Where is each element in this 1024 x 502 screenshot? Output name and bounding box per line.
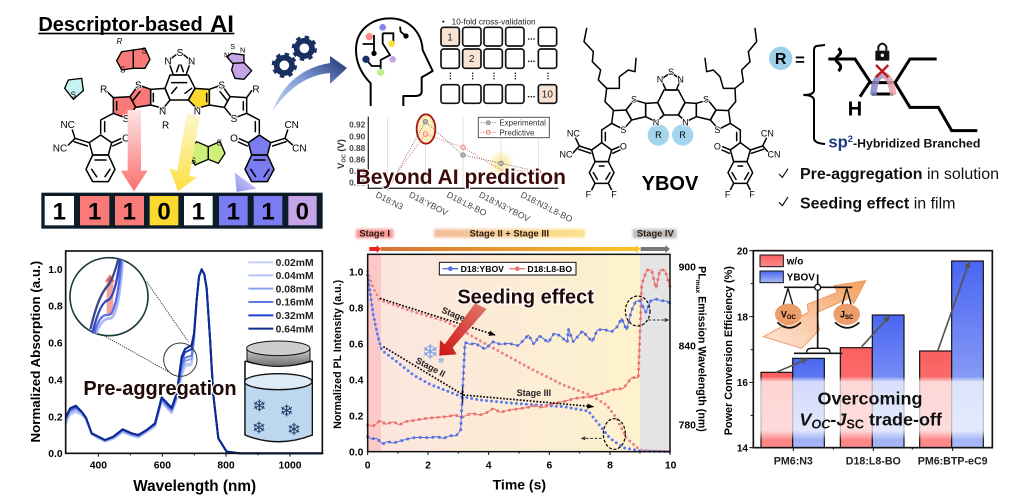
PL decay and emission curves	[368, 270, 671, 452]
R group definition	[769, 44, 977, 144]
molecule: YBOV: O	[714, 141, 721, 151]
chart legend	[439, 262, 576, 275]
arrow: curved blue flow	[272, 56, 347, 112]
chart axes: Emission Wavelength (nm)	[696, 293, 708, 432]
icon: vial with aggregates	[245, 341, 312, 442]
molecule: YBOV: CN	[768, 149, 780, 159]
absorption spectra	[66, 269, 322, 457]
chart axes	[28, 251, 322, 495]
heading: Seeding effect: Seeding effect	[457, 286, 594, 308]
bars	[761, 261, 983, 448]
10-fold cross-validation grid: 10-fold cross-validation	[452, 18, 536, 27]
R group definition: H	[848, 99, 862, 121]
chart axes: 900	[679, 262, 696, 273]
molecule: acceptor backbone with coloured fragments: S	[177, 48, 184, 59]
fragment: purple benzothiadiazole: S	[230, 42, 235, 51]
chart axes: 1000	[279, 461, 302, 472]
stage header labels: Stage II + Stage III	[470, 229, 549, 239]
line chart: VOC experimental vs predictive: V	[336, 163, 346, 169]
chart axes	[332, 254, 708, 493]
icon: snowflakes: ❄	[437, 357, 445, 367]
molecule: YBOV: CN	[761, 129, 774, 139]
chart axes: 2	[425, 460, 431, 471]
icon: balance with VOC and JSC	[763, 274, 866, 353]
fragment: green thienothiophene: S	[191, 156, 196, 165]
chart axes: 0.6	[48, 338, 63, 349]
fragment: green thienothiophene	[187, 139, 225, 165]
label: sp2-Hybridized Branched: -Hybridized Branched	[853, 136, 980, 150]
chart axes: 0	[365, 460, 371, 471]
concentration legend: 0.64mM	[276, 324, 314, 335]
icon: snowflakes	[422, 340, 445, 367]
fragment: red thienothiophene: S	[120, 66, 125, 75]
chart axes: PM6:BTP-eC9	[918, 456, 988, 468]
heading: overcoming trade-off: J	[836, 410, 847, 430]
molecule: YBOV: N	[657, 74, 663, 84]
molecule: YBOV: S	[668, 67, 674, 77]
chart axes: 16	[737, 378, 748, 389]
chart axes: 0.2	[349, 411, 364, 422]
molecule: acceptor backbone with coloured fragments: N	[164, 57, 172, 68]
line chart: VOC experimental vs predictive: D18:N3	[374, 190, 405, 212]
concentration legend: 0.04mM	[276, 271, 314, 282]
descriptor bit string: 1	[123, 198, 136, 225]
feature list	[779, 166, 999, 212]
descriptor bit string: 1	[88, 198, 101, 225]
icon: snowflakes: ❄	[422, 340, 439, 364]
chart axes: 0.0	[349, 447, 364, 458]
molecule: YBOV: R	[655, 130, 662, 140]
chart axes: 14	[737, 443, 748, 454]
chart axes: 0.2	[48, 412, 63, 423]
icon: vial with aggregates: ❄	[280, 402, 294, 421]
icon: gears	[273, 37, 315, 76]
label: sp2-Hybridized Branched: sp	[828, 132, 848, 151]
legend	[760, 255, 815, 284]
heading: overcoming trade-off: Overcoming	[818, 388, 922, 408]
stage background bands	[368, 254, 670, 452]
chart axes: 840	[679, 341, 696, 352]
10-fold cross-validation grid: 1	[447, 32, 453, 43]
chart axes: Normalized Absorption (a.u.)	[28, 261, 43, 443]
heading: overcoming trade-off: SC	[846, 417, 864, 431]
chart legend: D18:YBOV	[461, 264, 504, 274]
fragment: purple benzothiadiazole: N	[240, 46, 245, 55]
chart axes: PL	[696, 266, 708, 280]
molecule: acceptor backbone with coloured fragments	[53, 48, 307, 182]
descriptor bit string: 1	[227, 198, 240, 225]
annotation arrows and stage labels: Stage II	[414, 355, 447, 379]
molecule: acceptor backbone with coloured fragments: R	[190, 121, 197, 132]
fragment: cyan thiophene	[65, 78, 83, 100]
molecule: YBOV: NC	[560, 149, 573, 159]
molecule: acceptor backbone with coloured fragments: S	[218, 81, 225, 92]
molecule: YBOV: N	[682, 118, 689, 128]
label: YBOV: YBOV	[642, 173, 699, 195]
descriptor bit string: 1	[261, 198, 275, 225]
stage header labels: Stage IV	[637, 229, 675, 239]
descriptor bit string: 1	[53, 198, 66, 225]
descriptor bit string	[41, 193, 323, 229]
icon: balance with VOC and JSC: V	[781, 310, 787, 320]
molecule: YBOV: F	[586, 189, 592, 199]
molecule: YBOV: O	[620, 141, 627, 151]
gray trend arrows	[776, 262, 969, 372]
chart axes: 0.8	[48, 302, 63, 313]
heading: Pre-aggregation: Pre-aggregation	[83, 378, 237, 400]
arrow: violet	[235, 173, 257, 192]
fade overlay	[754, 377, 991, 440]
line chart: VOC experimental vs predictive: Experimental	[499, 119, 546, 128]
line chart: VOC experimental vs predictive: D18:N3:YBOV	[477, 190, 532, 224]
heading: overcoming trade-off	[799, 388, 943, 431]
line chart: VOC experimental vs predictive: 0.82	[349, 177, 366, 187]
chart axes: max	[694, 280, 701, 293]
icon: vial with aggregates: ❄	[252, 397, 266, 416]
molecule: acceptor backbone with coloured fragments: R	[100, 84, 107, 95]
chart axes: 6	[546, 460, 552, 471]
chart axes: 780	[679, 421, 696, 432]
chart axes: 400	[90, 461, 107, 472]
concentration legend: 0.16mM	[276, 298, 314, 309]
molecule: acceptor backbone with coloured fragments: NC	[53, 143, 67, 154]
heading: overcoming trade-off: V	[799, 410, 813, 430]
molecule: acceptor backbone with coloured fragments: N	[194, 106, 201, 117]
fragment: purple benzothiadiazole	[224, 42, 252, 79]
fragment: purple benzothiadiazole: N	[224, 50, 229, 59]
molecule: YBOV: F	[725, 189, 731, 199]
molecule: acceptor backbone with coloured fragments: N	[159, 106, 166, 117]
line chart: VOC experimental vs predictive: D18:L8-BO	[445, 190, 488, 218]
annotation arrows and stage labels: Stage II	[440, 305, 474, 326]
icon: vial with aggregates: ❄	[287, 420, 301, 439]
fragment: red thienothiophene	[116, 37, 150, 75]
chart axes: 1.0	[48, 265, 63, 276]
label: sp2-Hybridized Branched: 2	[848, 134, 853, 144]
molecule: acceptor backbone with coloured fragments: O	[122, 134, 130, 145]
arrow: seeding red	[439, 303, 487, 356]
chart axes: Time (s)	[493, 477, 546, 493]
arrow: yellow	[169, 113, 200, 191]
chart axes: 0.6	[349, 339, 364, 350]
chart axes: 4	[486, 460, 492, 471]
concentration legend: 0.08mM	[276, 284, 314, 295]
heading: overcoming trade-off: -	[830, 410, 836, 430]
panel: in-situ PL chart	[332, 229, 708, 493]
line chart: VOC experimental vs predictive: 0.90	[349, 131, 366, 141]
feature list: Seeding effect in film	[800, 195, 955, 212]
title: Descriptor-based AI: Descriptor-based	[38, 14, 203, 36]
chart axes: 600	[154, 461, 171, 472]
molecule: acceptor backbone with coloured fragments: NC	[60, 120, 75, 131]
heading: overcoming trade-off: trade-off	[864, 410, 943, 430]
chart axes: Wavelength (nm)	[133, 478, 256, 495]
descriptor bit string: 0	[296, 198, 309, 225]
molecule: acceptor backbone with coloured fragments: O	[230, 134, 238, 145]
legend: YBOV	[787, 273, 815, 284]
icon: AI head	[356, 18, 433, 106]
stage header labels: Stage I	[359, 229, 390, 239]
chart axes: 8	[607, 460, 613, 471]
line chart: VOC experimental vs predictive: Predictive	[499, 128, 535, 137]
panel: YBOV structure	[560, 28, 999, 212]
chart axes: 0.4	[349, 375, 364, 386]
stage header labels	[356, 229, 677, 239]
molecule: YBOV	[560, 28, 780, 199]
icon: balance with VOC and JSC: SC	[845, 315, 854, 321]
chart axes: 0.0	[48, 449, 63, 460]
stage timeline arrows	[369, 245, 670, 253]
line chart: VOC experimental vs predictive: 0.92	[349, 119, 366, 129]
molecule: acceptor backbone with coloured fragments: S	[135, 81, 142, 92]
concentration legend: 0.02mM	[276, 258, 314, 269]
molecule: YBOV: F	[749, 189, 755, 199]
fragment: cyan thiophene: S	[71, 91, 76, 100]
R group definition: =	[795, 50, 805, 69]
descriptor bit string: 1	[192, 198, 205, 225]
chart axes: 800	[217, 461, 235, 472]
molecule: YBOV: N	[677, 74, 684, 84]
chart axes: 1.0	[349, 267, 364, 278]
chart axes: Power Conversion Efficiency (%)	[723, 266, 735, 435]
molecule: YBOV: NC	[567, 129, 580, 139]
panel: absorption chart	[28, 251, 322, 495]
title: Descriptor-based AI: AI	[210, 11, 234, 38]
line chart: VOC experimental vs predictive: 0.86	[349, 155, 366, 165]
heading: Beyond AI prediction: Beyond AI prediction	[356, 166, 566, 189]
molecule: acceptor backbone with coloured fragments: S	[231, 114, 238, 125]
legend: w/o	[786, 257, 803, 268]
10-fold cross-validation grid: 10	[542, 89, 553, 100]
chart legend: D18:L8-BO	[527, 264, 572, 274]
annotation arrows and stage labels: Stage III	[517, 388, 551, 398]
molecule: YBOV: S	[620, 125, 626, 135]
line chart: VOC experimental vs predictive: D18:N3:L8-BO	[519, 190, 574, 224]
chart axes: PM6:N3	[774, 456, 813, 468]
molecule: acceptor backbone with coloured fragments: R	[162, 121, 169, 132]
title: Descriptor-based AI	[38, 11, 234, 38]
molecule: acceptor backbone with coloured fragments: S	[123, 114, 130, 125]
icon: balance with VOC and JSC: OC	[787, 315, 796, 321]
molecule: YBOV: S	[714, 125, 720, 135]
molecule: YBOV: S	[631, 95, 637, 105]
molecule: acceptor backbone with coloured fragments: CN	[292, 143, 307, 154]
chart axes: Normalized PL Intensity (a.u.)	[332, 279, 344, 429]
panel: descriptor-based AI	[38, 11, 323, 229]
chart axes: 18	[737, 312, 748, 323]
chart axes: 10	[665, 460, 677, 471]
annotation arrows and stage labels	[380, 296, 669, 449]
icon: balance with VOC and JSC: J	[840, 310, 845, 320]
fragment: green thienothiophene: S	[217, 139, 222, 148]
feature list: Pre-aggregation in solution	[800, 166, 999, 183]
line chart: VOC experimental vs predictive: D18:YBOV	[407, 190, 450, 218]
line chart: VOC experimental vs predictive: OC	[341, 154, 347, 163]
icon: vial with aggregates: ❄	[252, 418, 266, 437]
panel: AI model and prediction	[336, 18, 574, 224]
chart axes: 0.4	[48, 375, 63, 386]
R group definition: R	[775, 51, 787, 68]
molecule: YBOV: F	[611, 189, 617, 199]
callout: zoom inset on shoulder	[70, 258, 197, 376]
chart axes: D18:L8-BO	[846, 456, 901, 468]
molecule: acceptor backbone with coloured fragments: CN	[284, 120, 299, 131]
molecule: YBOV: S	[703, 95, 709, 105]
concentration legend	[248, 258, 314, 335]
fragment: red thienothiophene: S	[141, 46, 147, 55]
descriptor bit string: 0	[157, 198, 171, 225]
chart axes	[723, 246, 992, 468]
chart axes: 0.8	[349, 303, 364, 314]
chart axes: 20	[737, 246, 748, 257]
heading: overcoming trade-off: OC	[811, 417, 831, 431]
molecule: YBOV: R	[679, 130, 686, 140]
molecule: YBOV: N	[653, 118, 659, 128]
line chart: VOC experimental vs predictive	[336, 114, 574, 224]
10-fold cross-validation grid: 2	[469, 54, 475, 65]
panel: PCE bar chart	[723, 246, 992, 468]
line chart: VOC experimental vs predictive: 0.88	[349, 143, 366, 153]
10-fold cross-validation grid	[441, 18, 557, 103]
fragment: red thienothiophene: R	[116, 37, 122, 46]
molecule: acceptor backbone with coloured fragments: N	[188, 57, 195, 68]
arrow: red	[121, 110, 148, 191]
line chart: VOC experimental vs predictive: (V)	[336, 139, 346, 154]
concentration legend: 0.32mM	[276, 311, 314, 322]
molecule: acceptor backbone with coloured fragments: R	[252, 84, 260, 95]
line chart: VOC experimental vs predictive: 0.84	[349, 166, 366, 176]
